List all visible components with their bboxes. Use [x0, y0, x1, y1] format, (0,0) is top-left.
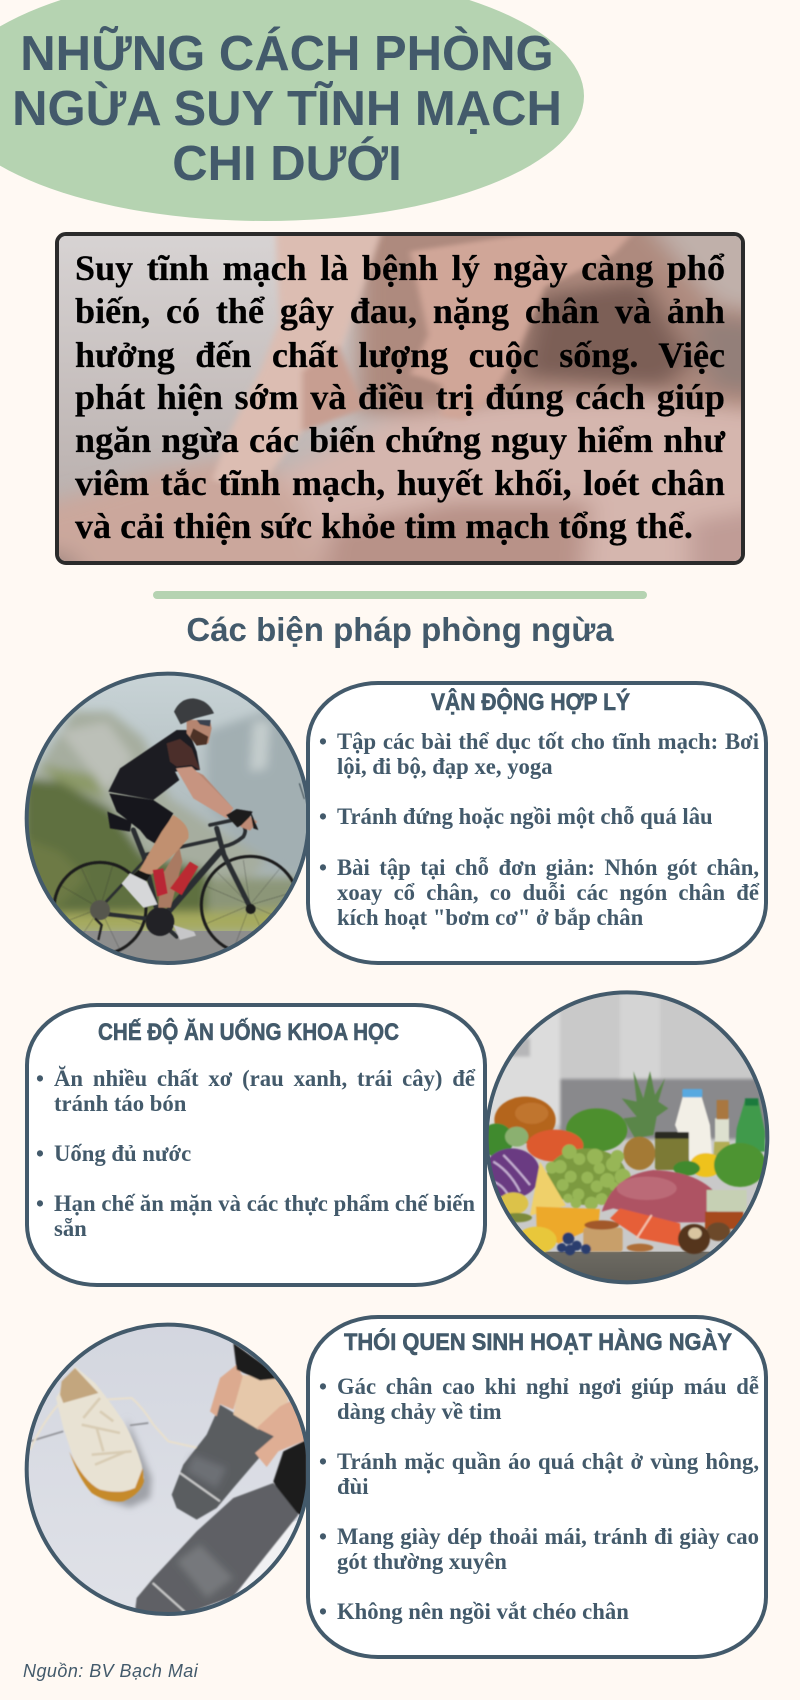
intro text: Suy tĩnh mạch là bệnh lý ngày càng phổ — [75, 248, 725, 288]
shoe — [56, 1366, 144, 1502]
panel: daily habits: • — [319, 1374, 327, 1399]
photo: socks and shoe — [24, 1322, 306, 1616]
photo: cyclist — [24, 672, 306, 965]
shorts — [109, 793, 173, 847]
lettuce right — [714, 1143, 766, 1187]
bullet list: exercise: Bài tập tại chỗ đơn giản: Nhón gót chân, — [337, 855, 759, 880]
panel: daily habits: • — [319, 1524, 327, 1549]
photo: healthy food — [487, 990, 770, 1284]
honey glass — [707, 1190, 747, 1212]
panel: diet: • — [36, 1066, 44, 1091]
title: NGỪA SUY TĨNH MẠCH — [12, 82, 562, 136]
bullet list: daily habits: Tránh mặc quần áo quá chật ở vùng hông, — [337, 1449, 759, 1474]
green bottle — [735, 1100, 765, 1152]
bullet list: daily habits: gót thường xuyên — [337, 1549, 507, 1574]
intro text: viêm tắc tĩnh mạch, huyết khối, loét chân — [75, 463, 725, 503]
intro text: phát hiện sớm và điều trị đúng cách giúp — [75, 377, 725, 417]
bullet list: daily habits: Gác chân cao khi nghỉ ngơi giúp máu dễ — [337, 1374, 759, 1399]
bullet list: diet: sẵn — [54, 1216, 87, 1241]
cabbage — [490, 1148, 540, 1197]
pasta — [498, 1192, 528, 1214]
section heading: Các biện pháp phòng ngừa — [186, 611, 614, 648]
bullet list: daily habits: dàng chảy về tim — [337, 1399, 501, 1424]
wheels and spokes — [57, 860, 295, 950]
sleeve — [167, 739, 200, 770]
bullet list: daily habits: Mang giày dép thoải mái, tránh đi giày cao — [337, 1524, 759, 1549]
bullet list: exercise: Tránh đứng hoặc ngồi một chỗ quá lâu — [337, 804, 713, 829]
panel: daily habits: • — [319, 1449, 327, 1474]
bullet list: diet: Ăn nhiều chất xơ (rau xanh, trái cây) để — [54, 1066, 475, 1091]
greens left — [488, 1122, 513, 1156]
bullet list: diet: tránh táo bón — [54, 1091, 186, 1116]
cheese — [530, 1162, 566, 1216]
title — [12, 26, 562, 191]
title: NHỮNG CÁCH PHÒNG — [20, 27, 554, 81]
foot — [233, 1375, 288, 1430]
floor shadows — [100, 1418, 152, 1507]
intro text: hưởng đến chất lượng cuộc sống. Việc — [75, 335, 725, 375]
lemon — [690, 1153, 722, 1177]
panel: diet: • — [36, 1191, 44, 1216]
jar — [655, 1135, 689, 1170]
blueberries — [557, 1232, 591, 1255]
heading: diet: CHẾ ĐỘ ĂN UỐNG KHOA HỌC — [98, 1018, 399, 1046]
meat — [602, 1170, 724, 1222]
bullet list: diet: Hạn chế ăn mặn và các thực phẩm chế biến — [54, 1191, 475, 1216]
citrus — [527, 1130, 583, 1162]
photo: hands on legs — [59, 236, 741, 561]
bullet list: exercise: lội, đi bộ, đạp xe, yoga — [337, 754, 553, 779]
panel: daily habits — [306, 1315, 768, 1659]
panel: daily habits: • — [319, 1599, 327, 1624]
lower sock — [135, 1483, 298, 1615]
bullet list: exercise: Tập các bài thể dục tốt cho tĩnh mạch: Bơi — [337, 729, 759, 754]
sock upper foot — [172, 1405, 277, 1520]
salmon — [610, 1208, 682, 1247]
bullet list: diet: Uống đủ nước — [54, 1141, 191, 1166]
near leg — [138, 815, 189, 874]
almonds — [627, 1244, 653, 1252]
pineapple — [622, 1071, 668, 1138]
saddle bag — [107, 812, 132, 832]
mushrooms — [706, 1222, 730, 1241]
grapes — [546, 1144, 631, 1210]
bullet list: daily habits — [319, 1374, 759, 1624]
intro text: ngăn ngừa các biến chứng nguy hiểm như — [75, 420, 725, 460]
panel: exercise: • — [319, 729, 327, 754]
far leg — [158, 847, 182, 908]
torso — [108, 730, 200, 800]
title background ellipse — [0, 0, 584, 221]
panel: exercise — [306, 681, 768, 965]
panel: exercise: • — [319, 804, 327, 829]
frame — [100, 820, 251, 937]
intro text — [74, 248, 726, 546]
head — [187, 720, 212, 745]
intro text: biến, có thể gây đau, nặng chân và ảnh — [75, 291, 725, 331]
bullet list: daily habits: đùi — [337, 1474, 369, 1499]
right hand — [255, 1398, 307, 1467]
source note: Nguồn: BV Bạch Mai — [23, 1661, 198, 1681]
nut cup — [583, 1228, 623, 1252]
bottles — [153, 868, 168, 897]
panel: diet: • — [36, 1141, 44, 1166]
bread — [494, 1097, 556, 1143]
arms — [197, 772, 231, 806]
heading: daily habits: THÓI QUEN SINH HOẠT HÀNG NGÀY — [344, 1328, 732, 1356]
bullet list: exercise: kích hoạt "bơm cơ" ở bắp chân — [337, 905, 643, 930]
milk — [675, 1097, 712, 1161]
left hand — [210, 1365, 243, 1416]
intro text: và cải thiện sức khỏe tim mạch tổng thể. — [75, 506, 693, 546]
laces — [30, 1398, 198, 1450]
divider — [153, 591, 647, 599]
bullet list: daily habits: Không nên ngồi vắt chéo chân — [337, 1599, 629, 1624]
oil — [715, 1118, 729, 1142]
heading: exercise: VẬN ĐỘNG HỢP LÝ — [431, 688, 630, 716]
bullet list: exercise: xoay cổ chân, co duỗi các ngón chân để — [337, 880, 759, 905]
bullet list: diet — [36, 1066, 476, 1241]
panel: introduction with legs photo — [55, 232, 745, 565]
bullet list: exercise — [319, 729, 760, 930]
panel: exercise: • — [319, 855, 327, 880]
lettuce — [566, 1108, 627, 1152]
title: CHI DƯỚI — [172, 137, 402, 191]
trousers — [233, 1343, 282, 1380]
panel: diet — [25, 1003, 487, 1287]
